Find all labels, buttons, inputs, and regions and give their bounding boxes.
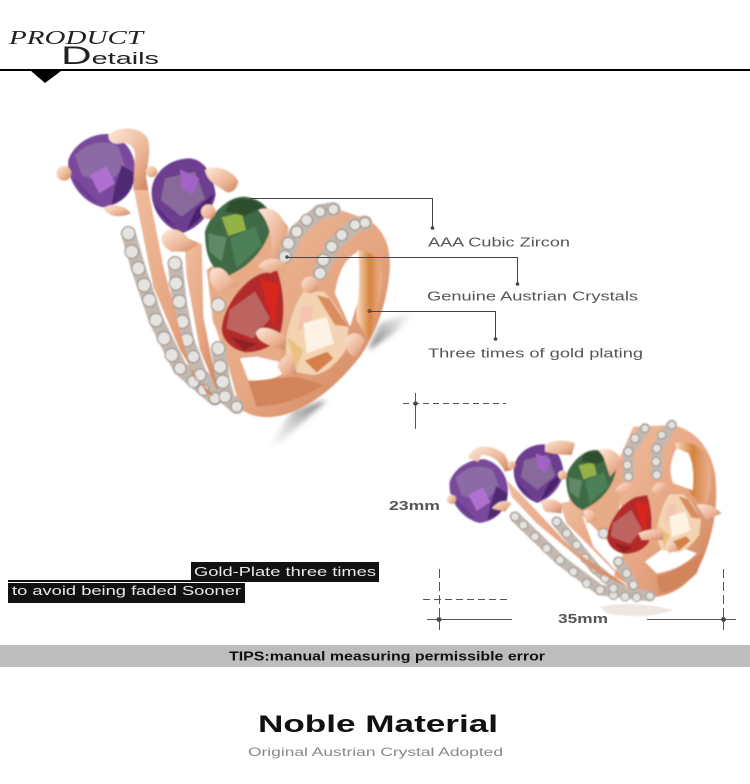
small ring opening <box>671 448 693 490</box>
small lower inner band <box>657 552 705 593</box>
green stone <box>205 197 272 277</box>
heading word: PRODUCT: PRODUCT <box>8 27 146 49</box>
width measure right marker <box>647 569 736 633</box>
black caption: Gold-Plate three times: to avoid being faded Sooner <box>12 583 242 598</box>
width measure left marker <box>423 569 512 633</box>
small ring shadow <box>600 604 673 616</box>
tips banner: TIPS:manual measuring permissible error <box>229 648 545 664</box>
small ring support <box>567 452 625 547</box>
red stone <box>222 271 283 352</box>
amethyst stone one <box>68 134 135 207</box>
pave backing <box>128 209 365 407</box>
ring inner face <box>357 250 382 340</box>
small champagne stone <box>657 494 701 552</box>
small red stone <box>607 495 652 554</box>
ring opening <box>335 252 359 327</box>
black caption: Gold-Plate three times: Gold-Plate three times <box>194 564 377 579</box>
small amethyst stone one <box>449 459 508 523</box>
callout: Genuine Austrian Crystals: Genuine Austrian Crystals <box>427 288 639 304</box>
lower inner band <box>248 377 323 407</box>
small ring inner face <box>675 442 711 508</box>
header rule <box>0 69 750 71</box>
dimension label: 23mm: 23mm <box>389 498 440 513</box>
small ring band <box>613 425 716 597</box>
amethyst stone two <box>152 158 216 233</box>
callout: Genuine Austrian Crystals <box>285 255 639 304</box>
gold prongs <box>57 128 365 377</box>
small lower opening <box>645 543 697 573</box>
header: Product Details <box>0 27 750 83</box>
champagne stone <box>286 292 348 375</box>
ring band <box>212 210 390 417</box>
height measure marker <box>403 393 506 429</box>
main ring shadow <box>267 310 417 450</box>
callout: AAA Cubic Zircon <box>250 198 570 250</box>
small green stone <box>566 450 617 510</box>
dimension label: 35mm: 35mm <box>558 611 608 626</box>
black caption: Gold-Plate three times <box>8 562 379 603</box>
tips banner <box>0 645 750 667</box>
small pave stones <box>511 421 676 602</box>
ring arms <box>133 187 215 397</box>
callout: AAA Cubic Zircon: AAA Cubic Zircon <box>428 234 570 250</box>
pointer triangle <box>31 71 61 83</box>
section subtitle: Original Austrian Crystal Adopted <box>248 745 503 759</box>
section title: Noble Material: Noble Material <box>258 711 498 738</box>
main ring illustration <box>57 128 390 417</box>
pave stones <box>122 204 370 412</box>
small ring arms <box>507 480 633 590</box>
ring support under stones <box>207 217 288 363</box>
callout: Three times of gold plating <box>368 309 643 360</box>
small gold prongs <box>447 440 722 553</box>
lower opening <box>240 357 283 380</box>
callout: Three times of gold plating: Three times of gold plating <box>428 346 643 360</box>
small ring illustration <box>447 421 722 616</box>
small pave backing <box>515 425 672 596</box>
heading word: Details: D etails <box>61 42 159 70</box>
small amethyst stone two <box>514 444 564 503</box>
